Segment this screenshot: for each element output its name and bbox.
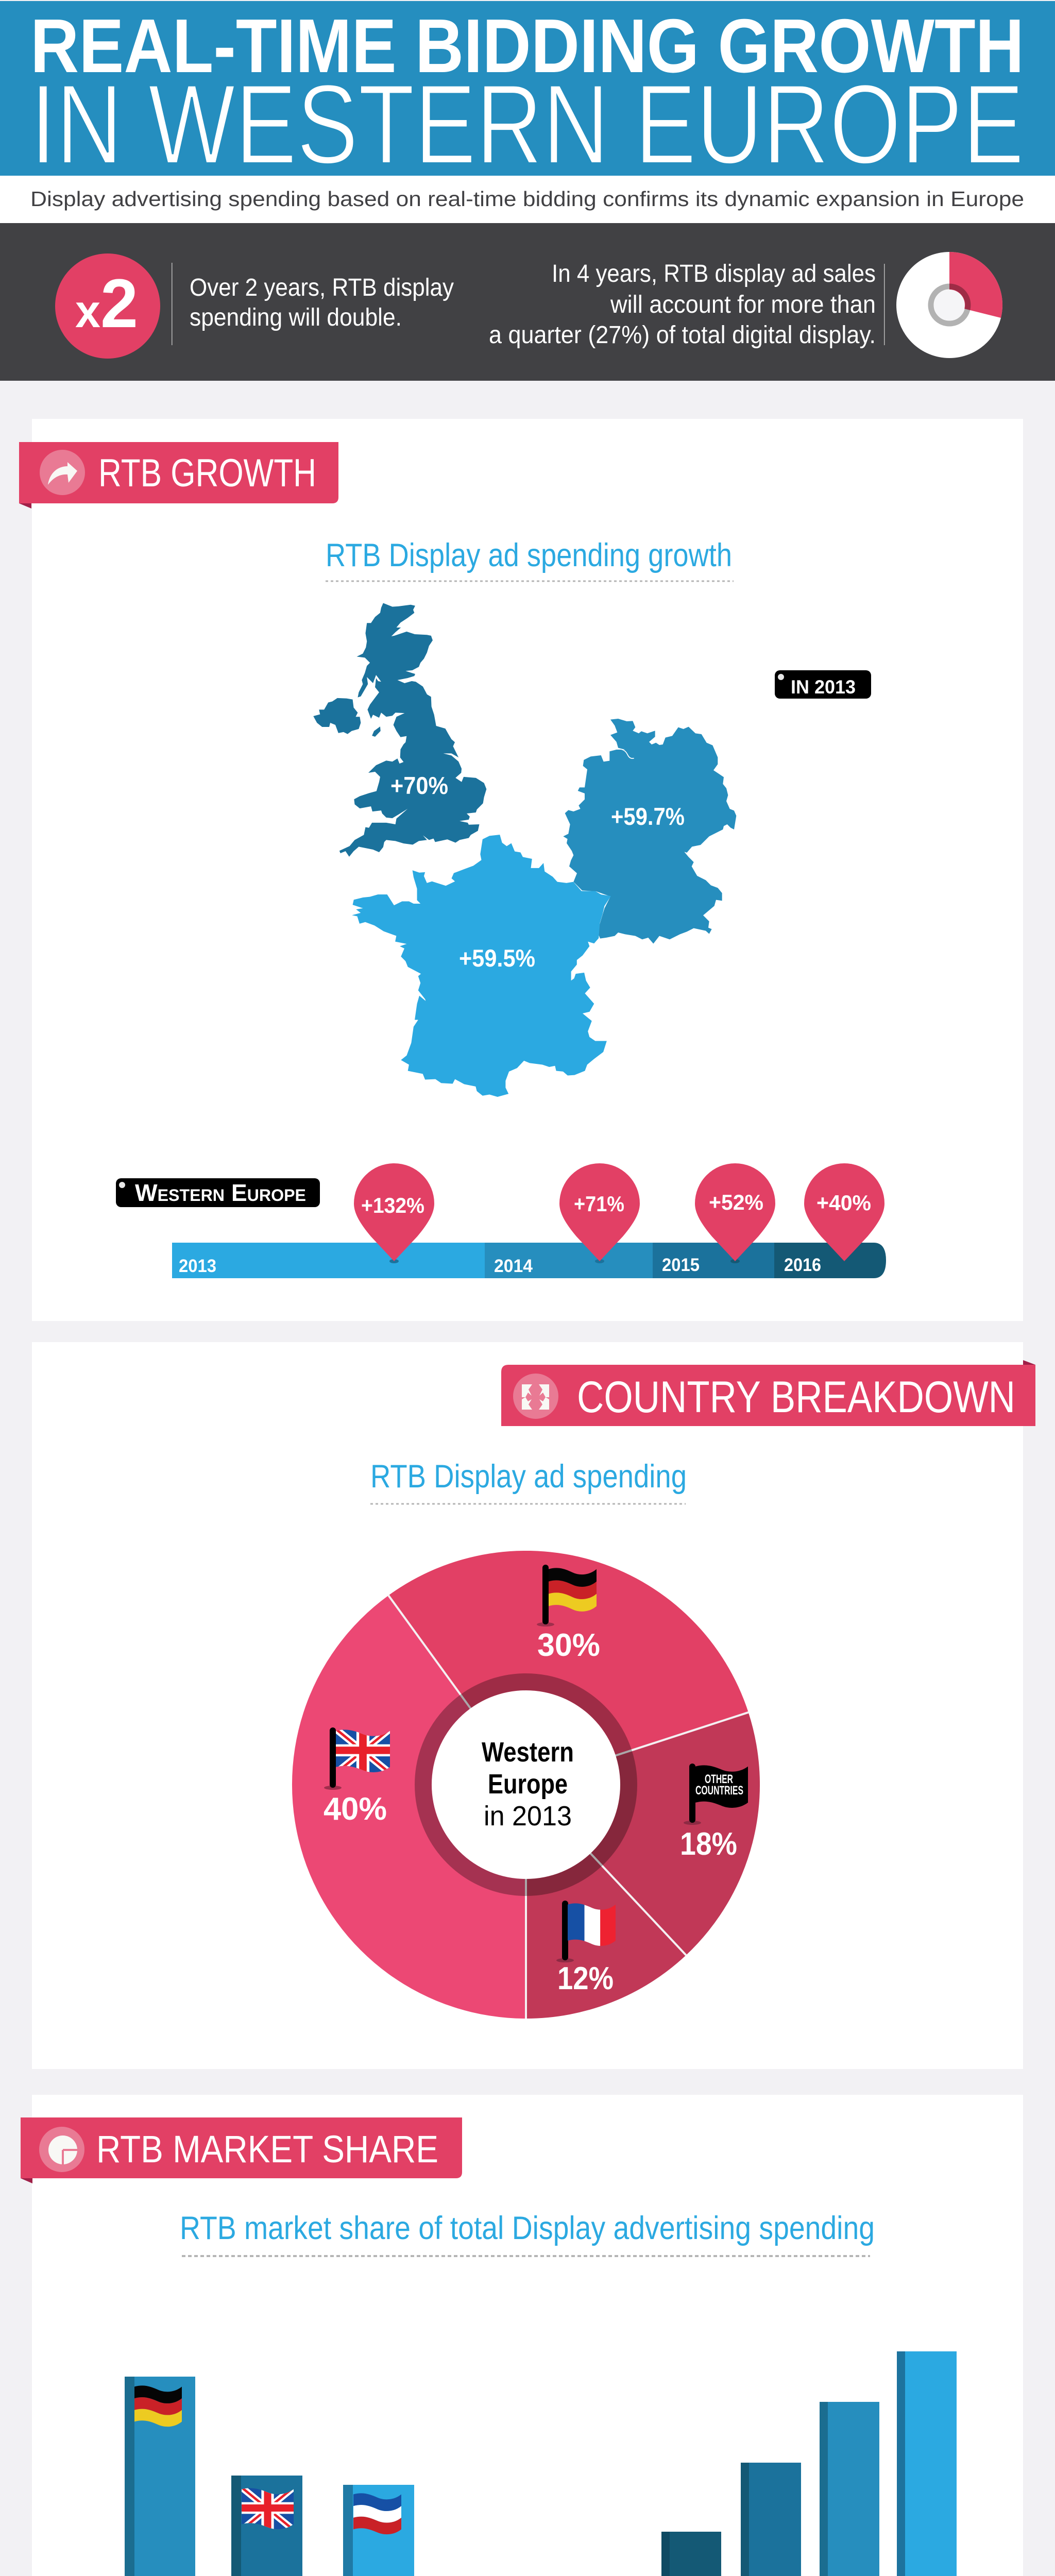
icon: 27% pie: [896, 252, 1002, 358]
slice: France 12%: [526, 1785, 686, 2019]
icon: x2 badge: [55, 253, 160, 359]
slice: other 18%: [526, 1713, 760, 1955]
tag: in 2013: [775, 670, 871, 699]
icon: x2 badge: x2: [75, 265, 138, 342]
value: France 12%: 12%: [557, 1961, 614, 1996]
flag: other countries: COUNTRIES: [695, 1784, 743, 1798]
pin: +52%: +52%: [709, 1190, 763, 1214]
map value: France: +59.5%: [459, 944, 535, 972]
value: Germany 30%: 30%: [537, 1628, 600, 1663]
chart heading: RTB Display ad spending growth: [326, 537, 732, 573]
pin: +52%: [695, 1163, 775, 1263]
pin: +71%: [559, 1163, 640, 1263]
fact: quarter of display: will account for more than: [610, 291, 876, 318]
map value: UK: +70%: [390, 772, 448, 799]
donut centre label: [482, 1737, 574, 1832]
section banner: RTB growth: [19, 442, 338, 509]
chart heading: RTB Display ad spending: [370, 1459, 687, 1495]
value: UK 40%: 40%: [324, 1791, 387, 1827]
map: France: [352, 835, 611, 1097]
slice: UK 40%: [292, 1596, 526, 2019]
fact: quarter of display: In 4 years, RTB display ad sales: [552, 260, 876, 287]
fact: quarter of display: [489, 260, 876, 349]
donut chart: [292, 1551, 760, 2019]
section banner: country breakdown: [501, 1360, 1035, 1426]
pin: +71%: +71%: [574, 1192, 624, 1216]
value: other 18%: 18%: [680, 1826, 737, 1862]
section banner: market share: RTB MARKET SHARE: [96, 2128, 438, 2171]
flag: France: [556, 1900, 617, 1962]
panel: RTB growth: [19, 419, 1023, 1321]
bar: 2014 19.4%: [741, 2463, 801, 2576]
bar: 2015 23.7%: [820, 2402, 879, 2576]
fact: double spending: [190, 274, 454, 331]
fact: quarter of display: a quarter (27%) of total digital display.: [489, 321, 876, 349]
timeline bar: 2013: [179, 1256, 216, 1276]
map value: Germany: +59.7%: [611, 803, 685, 830]
subtitle strip: [0, 176, 1055, 223]
tag: in 2013: IN 2013: [791, 676, 856, 698]
slice: Germany 30%: [388, 1551, 748, 1785]
flag: Germany: [537, 1565, 597, 1626]
donut centre label: Western: [482, 1737, 574, 1768]
donut centre label: Europe: [488, 1769, 568, 1800]
flag: UK: [324, 1727, 393, 1790]
subtitle text: Display advertising spending based on real-time bidding confirms its dynamic expansion in Europe: [30, 187, 1024, 211]
pin: +132%: [354, 1163, 434, 1263]
bar: Germany 17.2%: [125, 2377, 195, 2576]
section banner: market share: [21, 2117, 462, 2183]
donut centre label: in 2013: [484, 1801, 572, 1832]
bar: 2016 27.3%: [897, 2351, 957, 2576]
pin: +40%: +40%: [816, 1191, 871, 1215]
bar: 2013 14.5%: [661, 2532, 721, 2576]
bar: UK 12.4%: [231, 2476, 302, 2576]
pin: +132%: +132%: [361, 1193, 424, 1217]
bar: France 13%: [343, 2485, 414, 2576]
title band: [0, 1, 1055, 188]
key facts band: [0, 223, 1055, 381]
timeline bar: 2014: [494, 1256, 533, 1276]
fact: double spending: Over 2 years, RTB display: [190, 274, 454, 301]
timeline bar: 2016: [784, 1255, 821, 1275]
panel: country breakdown: [32, 1342, 1035, 2069]
map: United Kingdom: [313, 603, 486, 857]
flag: other countries: OTHER: [705, 1772, 733, 1786]
flag: other countries: [684, 1764, 748, 1825]
panel: RTB market share: [21, 2095, 1023, 2576]
section banner: RTB growth: RTB GROWTH: [98, 451, 316, 495]
pin: +40%: [804, 1163, 884, 1261]
fact: double spending: spending will double.: [190, 304, 402, 331]
timeline bar: 2015: [662, 1255, 700, 1275]
chart heading: RTB market share of total Display advertising spending: [180, 2210, 875, 2246]
tag: Western Europe: Western Europe: [135, 1179, 306, 1206]
timeline bar: [172, 1243, 886, 1278]
map: Germany: [563, 719, 736, 944]
